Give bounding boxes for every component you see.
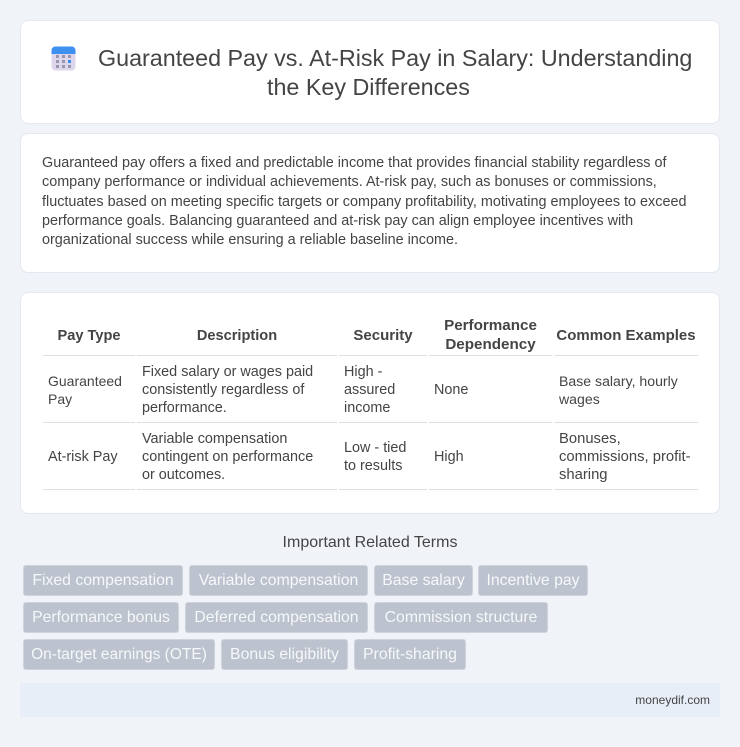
tag (23, 639, 215, 670)
related terms tags (23, 565, 588, 670)
row 1 security: assured (344, 382, 395, 398)
footer bar (20, 683, 720, 717)
tag (23, 565, 183, 596)
row 1 examples: Base salary, hourly (559, 373, 678, 389)
row 1: Guaranteed Pay: Pay (48, 391, 72, 407)
intro text: performance goals. Balancing guaranteed and at-risk pay can align employee incentives with (42, 213, 633, 229)
header: Security: Security (353, 327, 413, 344)
comparison table (43, 317, 698, 490)
row 1 description: performance. (142, 400, 227, 416)
row 1 dependency: None (434, 382, 468, 398)
header: Performance Dependency: Dependency (445, 336, 536, 353)
tag: Performance bonus (32, 609, 170, 626)
tag (185, 602, 368, 633)
row 1 security: High - (344, 364, 382, 380)
tag (354, 639, 466, 670)
tag: Deferred compensation (194, 609, 359, 626)
tag: On-target earnings (OTE) (31, 646, 207, 663)
row 2 description: Variable compensation (142, 431, 287, 447)
tag: Incentive pay (486, 572, 580, 589)
title (98, 45, 692, 100)
tag (221, 639, 348, 670)
icon: calendar (52, 46, 76, 70)
tag (189, 565, 368, 596)
header: Description: Description (197, 328, 277, 344)
header card (20, 20, 720, 124)
intro text: organizational success while ensuring a reliable baseline income. (42, 232, 458, 248)
row 2 dependency: High (434, 449, 464, 465)
footer source: moneydif.com (635, 693, 710, 707)
row 2 security: Low - tied (344, 440, 406, 456)
related terms heading: Important Related Terms (283, 534, 457, 551)
intro text: fluctuates based on meeting specific targets or company profitability, motivating employees to exceed (42, 194, 686, 210)
row 1 examples (559, 373, 678, 407)
row 2 description: contingent on performance (142, 449, 313, 465)
tag: Variable compensation (199, 572, 358, 589)
row 2 examples: Bonuses, (559, 431, 621, 447)
row 1: Guaranteed Pay: Guaranteed (48, 373, 122, 389)
header: Performance Dependency (444, 317, 537, 353)
row 2 description (142, 431, 313, 483)
row 2 examples: sharing (559, 467, 608, 483)
table card (20, 292, 720, 514)
row 1 description: Fixed salary or wages paid (142, 364, 313, 380)
row 2: At-risk Pay: At-risk Pay (48, 449, 118, 465)
title: Guaranteed Pay vs. At-Risk Pay in Salary: Understanding (98, 45, 692, 71)
intro text: Guaranteed pay offers a fixed and predictable income that provides financial stability regardless of (42, 155, 666, 171)
title: the Key Differences (267, 74, 470, 100)
row 1 description (142, 364, 313, 416)
intro text: company performance or individual achievements. At-risk pay, such as bonuses or commissions, (42, 174, 657, 190)
tag (374, 602, 548, 633)
row 1: Guaranteed Pay (48, 373, 122, 407)
row 2 description: or outcomes. (142, 467, 225, 483)
row 2 examples (559, 431, 691, 483)
row 1 examples: wages (559, 391, 600, 407)
tag: Commission structure (385, 609, 537, 626)
row 2 security (344, 440, 406, 474)
header: Pay Type: Pay Type (58, 328, 120, 344)
intro text (42, 155, 686, 248)
row 1 description: consistently regardless of (142, 382, 304, 398)
row 2 examples: commissions, profit- (559, 449, 691, 465)
row 1 security (344, 364, 395, 416)
tag: Base salary (382, 572, 465, 589)
tag (478, 565, 588, 596)
intro card (20, 133, 720, 273)
tag (23, 602, 179, 633)
row 2 security: to results (344, 458, 402, 474)
tag: Profit-sharing (363, 646, 457, 663)
header: Common Examples: Common Examples (556, 327, 696, 344)
tag: Fixed compensation (32, 572, 174, 589)
row 1 security: income (344, 400, 390, 416)
tag: Bonus eligibility (230, 646, 339, 663)
tag (374, 565, 473, 596)
header: Performance Dependency: Performance (444, 317, 537, 334)
